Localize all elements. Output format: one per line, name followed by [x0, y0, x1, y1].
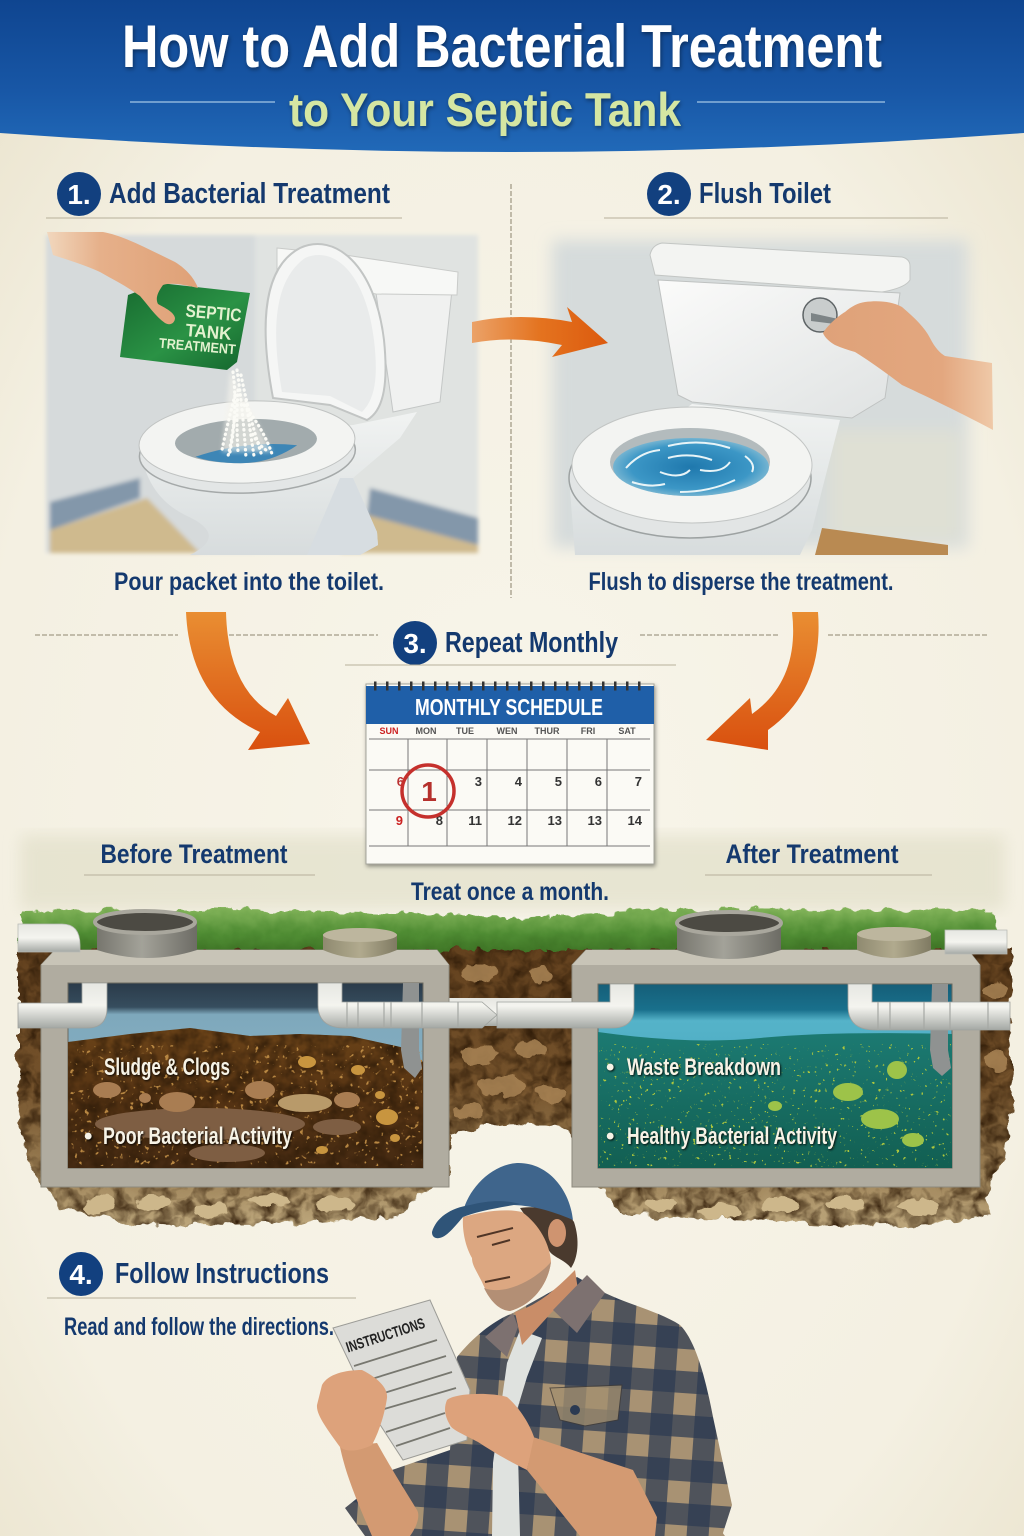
toilet tank	[376, 290, 452, 412]
forearm right	[527, 1437, 657, 1536]
concrete shell	[572, 950, 980, 1187]
hand	[823, 301, 993, 430]
after tank	[497, 912, 1010, 1187]
tank lid	[650, 243, 910, 292]
tank	[658, 280, 900, 418]
header banner	[0, 0, 1024, 152]
dates: 3	[475, 774, 482, 789]
dates: 6	[397, 774, 404, 789]
step 4 heading: 4.	[69, 1259, 93, 1290]
binding rings	[374, 682, 642, 690]
left hand	[317, 1370, 387, 1451]
rolled sleeve cuff	[630, 1460, 725, 1536]
step 2 heading: 2.	[657, 179, 681, 210]
weekday labels	[379, 726, 636, 736]
weekday labels: THUR	[534, 726, 560, 736]
bacteria speckles	[599, 1044, 951, 1167]
calendar title: MONTHLY SCHEDULE	[415, 694, 603, 720]
access lid	[857, 927, 931, 958]
weekday labels: FRI	[581, 726, 595, 736]
green packet: TANK	[185, 320, 232, 344]
poor activity label: •	[84, 1123, 92, 1150]
caption 4: Read and follow the directions.	[64, 1313, 334, 1341]
treated water	[598, 1032, 952, 1168]
haze behind before and after labels	[20, 835, 1005, 910]
dashed dividers	[35, 184, 988, 635]
plaid shirt	[345, 1277, 732, 1536]
dates: 11	[468, 813, 482, 828]
neck	[515, 1270, 578, 1345]
white undershirt	[492, 1330, 542, 1536]
illustration: pouring packet into toilet	[46, 232, 478, 555]
weekday labels: WEN	[496, 726, 518, 736]
dates: 12	[508, 813, 522, 828]
weekday labels: MON	[416, 726, 436, 736]
arrow: step 2 to calendar	[706, 612, 819, 750]
step 3 heading: 3.	[403, 628, 427, 659]
inlet pipe	[18, 924, 107, 1028]
step 1 heading: Add Bacterial Treatment	[109, 178, 390, 210]
caption 3: Treat once a month.	[411, 878, 609, 906]
outlet pipe	[848, 930, 1010, 1076]
inlet pipe	[497, 984, 634, 1028]
raised lid	[266, 244, 386, 420]
access riser	[95, 911, 197, 958]
access lid	[323, 928, 397, 958]
green packet: SEPTIC	[185, 301, 242, 325]
poor activity label	[84, 1123, 292, 1150]
green packet: TREATMENT	[158, 335, 237, 357]
step 2 heading	[604, 172, 948, 218]
access riser	[677, 912, 781, 959]
swirling water	[610, 428, 770, 496]
healthy activity label: •	[606, 1123, 614, 1150]
outlet pipe	[318, 983, 497, 1078]
dates: 6	[595, 774, 602, 789]
toilet seat	[138, 397, 357, 497]
bowl and pedestal	[140, 412, 417, 555]
waste breakdown label: Waste Breakdown	[627, 1054, 781, 1081]
weekday labels: SUN	[379, 726, 399, 736]
dates: 8	[436, 813, 443, 828]
dates: 14	[628, 813, 643, 828]
step 3 heading	[345, 621, 676, 665]
hand	[47, 232, 198, 324]
sludge rocks	[70, 1045, 422, 1166]
dates: 13	[588, 813, 602, 828]
before tank	[18, 911, 497, 1187]
instruction sheet	[333, 1300, 470, 1460]
calendar	[366, 684, 654, 864]
subtitle: to Your Septic Tank	[289, 83, 682, 136]
base	[570, 404, 840, 555]
connector pipe	[440, 998, 590, 1026]
ground soil	[18, 948, 1012, 1226]
waste breakdown label: •	[606, 1054, 614, 1081]
before treatment label: Before Treatment	[100, 839, 288, 869]
hair and ear	[463, 1207, 578, 1311]
instruction sheet: INSTRUCTIONS	[344, 1315, 427, 1356]
dates: 9	[396, 813, 403, 828]
grass	[20, 909, 1000, 950]
green packet	[120, 283, 250, 370]
dates	[396, 774, 643, 828]
collars	[485, 1275, 605, 1357]
flush handle	[803, 298, 837, 332]
caption 2: Flush to disperse the treatment.	[588, 568, 894, 596]
seat	[569, 418, 811, 538]
step 1 heading	[46, 172, 402, 218]
step 4 heading	[47, 1252, 356, 1298]
weekday labels: TUE	[456, 726, 474, 736]
step 2 heading: Flush Toilet	[699, 178, 831, 210]
dates: 5	[555, 774, 562, 789]
poor activity label: Poor Bacterial Activity	[103, 1123, 292, 1150]
concrete shell	[41, 950, 449, 1187]
dates: 7	[635, 774, 642, 789]
red circled date	[402, 765, 454, 817]
dates: 13	[548, 813, 562, 828]
falling powder	[222, 370, 272, 458]
cap	[432, 1163, 573, 1238]
title: How to Add Bacterial Treatment	[122, 13, 882, 80]
sludge	[68, 1028, 423, 1168]
illustration: flushing toilet	[552, 240, 993, 555]
step 4 heading: Follow Instructions	[115, 1258, 329, 1290]
dates: 4	[515, 774, 523, 789]
sludge label: Sludge & Clogs	[104, 1054, 230, 1081]
caption 1: Pour packet into the toilet.	[114, 568, 384, 596]
arrow: step 1 to calendar	[186, 612, 310, 750]
step 3 heading: Repeat Monthly	[445, 627, 618, 659]
arrow: step 1 to 2	[472, 307, 608, 357]
man reading instructions	[317, 1163, 732, 1536]
weekday labels: SAT	[618, 726, 636, 736]
after treatment label: After Treatment	[726, 839, 899, 869]
step 1 heading: 1.	[67, 179, 91, 210]
grid	[369, 739, 650, 846]
shirt pocket	[550, 1385, 622, 1426]
healthy activity label: Healthy Bacterial Activity	[627, 1123, 837, 1150]
right hand	[445, 1394, 534, 1470]
waste breakdown label	[606, 1054, 781, 1081]
left forearm	[340, 1443, 418, 1536]
red circled date: 1	[421, 776, 437, 807]
leaf flakes	[768, 1061, 924, 1147]
healthy activity label	[606, 1123, 837, 1150]
